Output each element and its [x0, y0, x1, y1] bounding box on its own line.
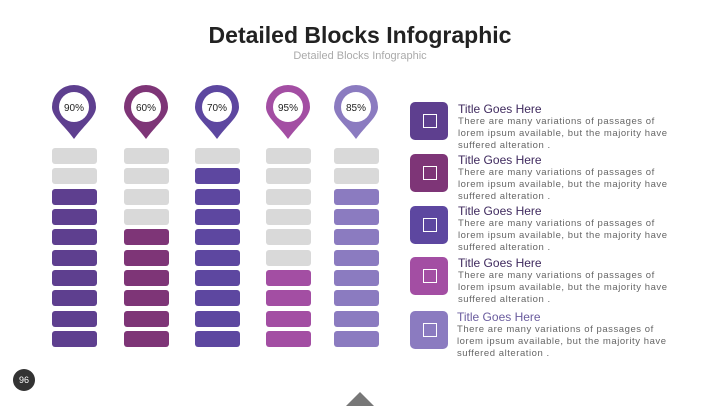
- text block 3: lorem ipsum available, but the majority have: [458, 230, 668, 241]
- text block 4: Title Goes Here: [458, 256, 542, 270]
- text block 3: suffered alteration .: [458, 242, 551, 253]
- icon square 3: [410, 206, 448, 244]
- icon square 5: [410, 311, 448, 349]
- text block 1: suffered alteration .: [458, 140, 551, 151]
- pin 3: 70%: [207, 103, 227, 114]
- bar column 3: [195, 148, 240, 347]
- text block 5: suffered alteration .: [457, 348, 550, 359]
- pin 5: 85%: [346, 103, 366, 114]
- bar column 1: [52, 148, 97, 347]
- bar column 2: [124, 148, 169, 347]
- text block 3: There are many variations of passages of: [458, 218, 655, 229]
- page number: 96: [19, 375, 29, 385]
- text block 1: [458, 102, 668, 151]
- text block 2: lorem ipsum available, but the majority have: [458, 179, 668, 190]
- subtitle: Detailed Blocks Infographic: [293, 50, 427, 62]
- pin 1: [52, 85, 96, 139]
- text block 4: [458, 256, 668, 305]
- text block 4: suffered alteration .: [458, 294, 551, 305]
- text block 5: Title Goes Here: [457, 310, 541, 324]
- text block 2: suffered alteration .: [458, 191, 551, 202]
- text block 1: Title Goes Here: [458, 102, 542, 116]
- pin 5: [334, 85, 378, 139]
- text block 3: Title Goes Here: [458, 204, 542, 218]
- text block 2: Title Goes Here: [458, 153, 542, 167]
- pin 2: [124, 85, 168, 139]
- pins: [52, 85, 378, 139]
- text block 2: There are many variations of passages of: [458, 167, 655, 178]
- text block 1: lorem ipsum available, but the majority have: [458, 128, 668, 139]
- page number: [13, 369, 35, 391]
- text block 4: There are many variations of passages of: [458, 270, 655, 281]
- pin 4: 95%: [278, 103, 298, 114]
- icon square 4: [410, 257, 448, 295]
- text block 2: [458, 153, 668, 202]
- icon square 2: [410, 154, 448, 192]
- pin 4: [266, 85, 310, 139]
- bottom triangle: [346, 392, 374, 406]
- pin 1: 90%: [64, 103, 84, 114]
- pin 2: 60%: [136, 103, 156, 114]
- pin 3: [195, 85, 239, 139]
- bar column 4: [266, 148, 311, 347]
- bar column 5: [334, 148, 379, 347]
- text block 3: [458, 204, 668, 253]
- text block 5: [457, 310, 667, 359]
- title: Detailed Blocks Infographic: [209, 22, 511, 48]
- text block 4: lorem ipsum available, but the majority have: [458, 282, 668, 293]
- text block 5: lorem ipsum available, but the majority have: [457, 336, 667, 347]
- text block 1: There are many variations of passages of: [458, 116, 655, 127]
- text block 5: There are many variations of passages of: [457, 324, 654, 335]
- icon square 1: [410, 102, 448, 140]
